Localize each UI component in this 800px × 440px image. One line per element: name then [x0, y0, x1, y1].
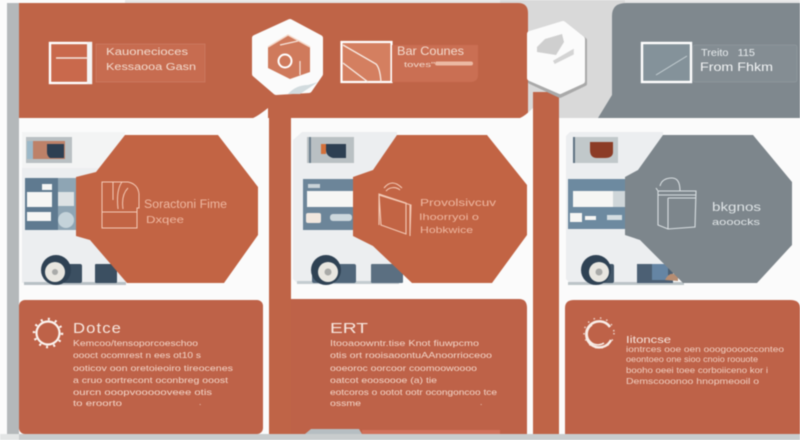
- icon: bag: [656, 178, 696, 229]
- body text: a cruo oortrecont oconbreg ooost: [73, 375, 229, 385]
- panel: octagon one: Dxqee: [146, 214, 184, 226]
- body text: iontrces ooe oen ooogoooocconteo: [626, 345, 785, 354]
- panel: orange header: [19, 3, 559, 435]
- icon: book: [379, 183, 411, 236]
- icon: header square one: [50, 42, 92, 84]
- icon: header square three: [642, 43, 691, 82]
- header text three: Treito 115: [701, 48, 755, 59]
- body text: ooeoroc oorcoor coomoowoooo: [330, 363, 477, 373]
- icon: header square two: [342, 42, 392, 82]
- illustration: machine two: [293, 132, 403, 285]
- panel: text card three: [565, 300, 800, 434]
- header text one: Kessaooa Gasn: [106, 62, 196, 73]
- body text: to eroorto: [73, 398, 122, 408]
- label text: bkgnos: [712, 202, 761, 214]
- body text: otis ort rooisaoontuAAnoorrioceoo: [330, 350, 492, 360]
- panel: text card two: [291, 299, 527, 434]
- header text two: [392, 44, 478, 82]
- body text: booho oeei toee corboiiceno kor i: [626, 366, 768, 375]
- icon: frame: [102, 182, 139, 228]
- body text: [626, 345, 785, 386]
- panel: octagon two: Hobkwice: [420, 225, 473, 236]
- body text: .: [480, 397, 482, 407]
- body text: oatcot eoosoooe (a) tie: [330, 375, 437, 385]
- label text: Provolsivcuv: [420, 197, 497, 209]
- panel: octagon three: aooocks: [712, 217, 760, 228]
- heading: Iitoncse: [626, 335, 672, 346]
- illustration: machine one: [22, 132, 126, 285]
- icon: gear: [34, 319, 62, 347]
- body text: oooct ocomrest n ees ot10 s: [73, 350, 201, 360]
- header text one: [96, 44, 205, 82]
- panel: white column two: [291, 108, 533, 435]
- panel: text card one: [19, 300, 263, 434]
- body text: Itooaoowntr.tise Knot fiuwpcmo: [330, 338, 479, 348]
- panel: octagon two: [353, 135, 527, 283]
- header text two: Bar Counes: [397, 44, 464, 58]
- body text: .: [199, 397, 201, 407]
- panel: white column one: [19, 108, 268, 435]
- icon: hexagon badge two: [530, 24, 585, 96]
- body text: Kemcoo/tensoporcoeschoo: [73, 338, 198, 348]
- body text: eotcoros o ootot ootr ocongoncoo tce: [330, 387, 497, 397]
- body text: [330, 338, 497, 408]
- bottom strip: [0, 429, 800, 440]
- body text: Demscooonoo hnopmeooil o: [626, 377, 760, 386]
- header text three: From Fhkm: [700, 60, 773, 74]
- heading: ERT: [330, 320, 368, 337]
- icon: gear C: [584, 318, 614, 348]
- panel: white column three: [559, 118, 800, 435]
- header text three: [693, 45, 797, 82]
- label text: Soractoni Fime: [144, 199, 227, 211]
- heading: Dotce: [73, 320, 122, 337]
- body text: ossme: [330, 398, 361, 408]
- panel: octagon two: Ihoorryoi o: [419, 212, 479, 223]
- panel: octagon one: [76, 135, 258, 283]
- panel: grey header: [598, 3, 800, 118]
- body text: ourcn ooopvoooooveee otis: [73, 387, 212, 397]
- body text: [73, 338, 233, 408]
- header text one: Kauonecioces: [106, 47, 188, 58]
- header text two: toves": [404, 60, 436, 69]
- body text: oeontoeo one sioo cnoio roouote: [626, 355, 759, 364]
- body text: ooticov oon oretoieoiro tireocenes: [73, 363, 233, 373]
- panel: octagon three: [625, 135, 792, 283]
- icon: hexagon badge one: [255, 22, 320, 94]
- illustration: machine three: [566, 132, 684, 285]
